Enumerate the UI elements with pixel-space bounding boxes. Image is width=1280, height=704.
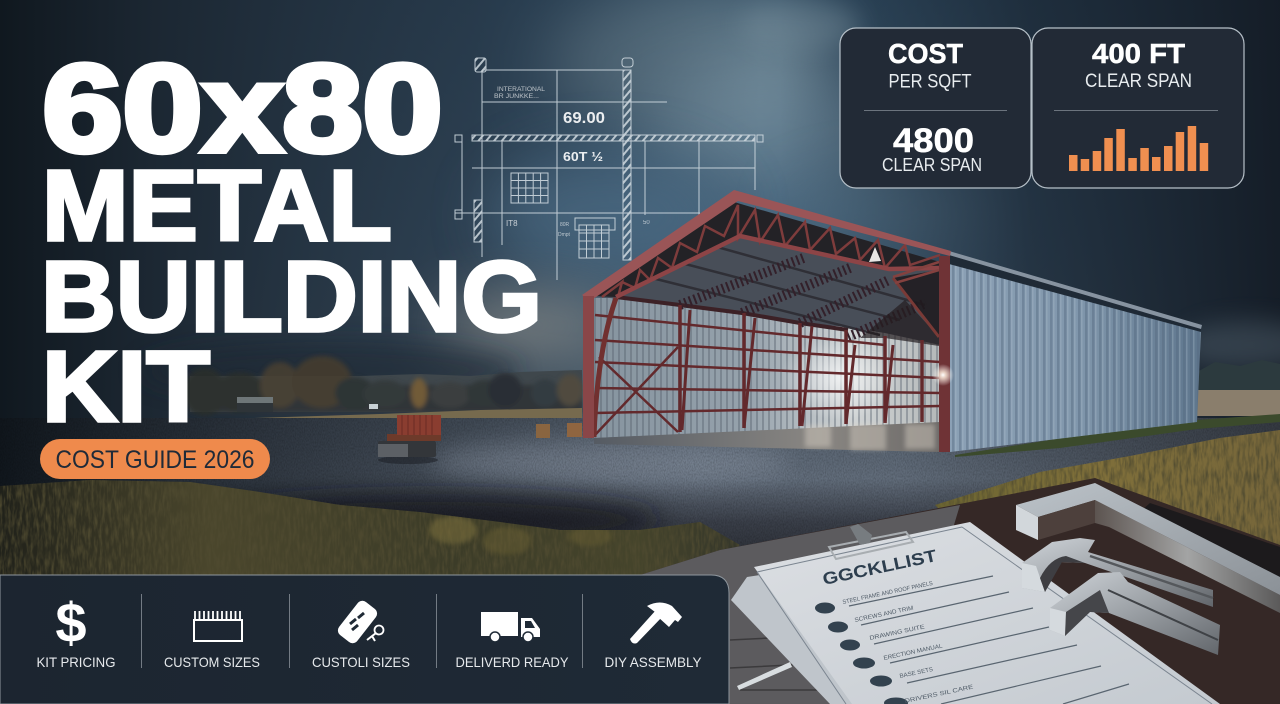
hammer two bbox=[1050, 572, 1220, 655]
feature: custom sizes: CUSTOM SIZES bbox=[164, 654, 260, 670]
checklist rows: ERECTION MANUAL bbox=[883, 643, 944, 662]
checklist rows: STEEL FRAME AND ROOF PANELS bbox=[842, 581, 933, 606]
icon: delivery truck bbox=[481, 612, 540, 642]
blueprint dimension labels: 50 bbox=[643, 220, 650, 226]
wooden crates bbox=[536, 423, 582, 438]
stat 400 FT CLEAR SPAN bbox=[1085, 38, 1192, 92]
cost guide pill badge: COST GUIDE 2026 bbox=[56, 446, 254, 474]
icon: tag and key bbox=[336, 598, 384, 646]
stat 400 FT CLEAR SPAN: 400 FT bbox=[1092, 38, 1185, 69]
stat card right bbox=[1032, 28, 1244, 188]
checklist rows bbox=[815, 576, 1129, 704]
distant treeline and field bbox=[183, 356, 1280, 421]
blueprint dimension labels: INTERATIONAL bbox=[497, 86, 545, 93]
ceiling bbox=[600, 234, 940, 346]
stat 4800 CLEAR SPAN: 4800 bbox=[893, 122, 974, 160]
title line KIT: KIT bbox=[42, 331, 210, 443]
stat COST PER SQFT: PER SQFT bbox=[888, 72, 972, 92]
blueprint dimension labels: 60T ½ bbox=[563, 149, 603, 164]
title line 60x80: 60x80 bbox=[42, 40, 442, 178]
side wall bbox=[950, 258, 1201, 452]
wet asphalt ground bbox=[0, 418, 1280, 578]
roof edge bbox=[949, 251, 1202, 332]
blueprint dimension labels: IT8 bbox=[506, 219, 518, 228]
checklist rows: DRAWING SUITE bbox=[869, 624, 925, 642]
stat card left bbox=[840, 28, 1031, 188]
orange bar chart bbox=[1069, 126, 1208, 171]
wall lamp glow bbox=[932, 364, 954, 386]
foreground grass right bbox=[935, 430, 1280, 545]
floor reflections bbox=[805, 424, 935, 450]
stat COST PER SQFT: COST bbox=[888, 38, 963, 69]
blueprint drawing overlay bbox=[455, 58, 763, 280]
stat 4800 CLEAR SPAN: CLEAR SPAN bbox=[882, 155, 982, 175]
metal building bbox=[582, 190, 1202, 452]
hammer one bbox=[1022, 538, 1213, 607]
feature: kit pricing: KIT PRICING bbox=[36, 654, 116, 670]
sky background bbox=[0, 0, 1280, 420]
feature: custoli sizes: CUSTOLI SIZES bbox=[312, 654, 410, 670]
red cargo trailer bbox=[378, 415, 441, 464]
truss web bbox=[590, 202, 940, 297]
feature: diy assembly: DIY ASSEMBLY bbox=[604, 654, 702, 670]
wall girts and columns bbox=[594, 278, 940, 437]
roof trim bbox=[582, 190, 951, 301]
icon: dollar sign: $ bbox=[55, 591, 87, 654]
icon: ruler bbox=[194, 611, 242, 641]
title line BUILDING: BUILDING bbox=[41, 241, 542, 353]
foreground grass left bbox=[0, 480, 740, 574]
feature: kit pricing bbox=[36, 591, 116, 670]
clipboard clip bbox=[829, 524, 913, 559]
desk surface bbox=[640, 478, 1280, 704]
cost guide pill badge bbox=[40, 439, 270, 479]
left post bbox=[583, 296, 594, 438]
feature: custoli sizes bbox=[312, 598, 410, 670]
interior back and left wall bbox=[594, 298, 940, 438]
pen bbox=[737, 662, 792, 690]
checklist paper bbox=[754, 522, 1220, 704]
stat COST PER SQFT bbox=[888, 38, 972, 92]
bottom features panel bbox=[0, 575, 729, 704]
stat 4800 CLEAR SPAN bbox=[882, 122, 982, 175]
feature: diy assembly bbox=[604, 602, 702, 670]
title: 60x80 metal building kit bbox=[41, 40, 542, 443]
blueprint dimension labels: Dmpt bbox=[558, 232, 571, 238]
stat 400 FT CLEAR SPAN: CLEAR SPAN bbox=[1085, 71, 1192, 92]
icon: hammer bbox=[630, 602, 682, 644]
right post bbox=[939, 256, 950, 452]
feature: delivered ready bbox=[456, 612, 569, 670]
feature: delivered ready: DELIVERD READY bbox=[456, 654, 569, 670]
metal L bracket tool bbox=[1016, 483, 1280, 613]
checklist rows: BASE SETS bbox=[899, 667, 934, 680]
green strip along building wall bbox=[955, 414, 1280, 457]
blueprint dimension labels: BR JUNKKE... bbox=[494, 93, 539, 100]
back paper bbox=[731, 575, 860, 704]
blueprint dimension labels bbox=[494, 86, 650, 238]
feature: custom sizes bbox=[164, 611, 260, 670]
blueprint dimension labels: 80R bbox=[560, 222, 570, 228]
interior floor bbox=[594, 422, 940, 452]
checklist heading: GGCKLLIST bbox=[821, 546, 939, 589]
blueprint dimension labels: 69.00 bbox=[563, 110, 605, 127]
checklist rows: SCREWS AND TRIM bbox=[854, 606, 914, 624]
title line METAL: METAL bbox=[42, 150, 392, 262]
desk and checklist bbox=[640, 478, 1280, 704]
